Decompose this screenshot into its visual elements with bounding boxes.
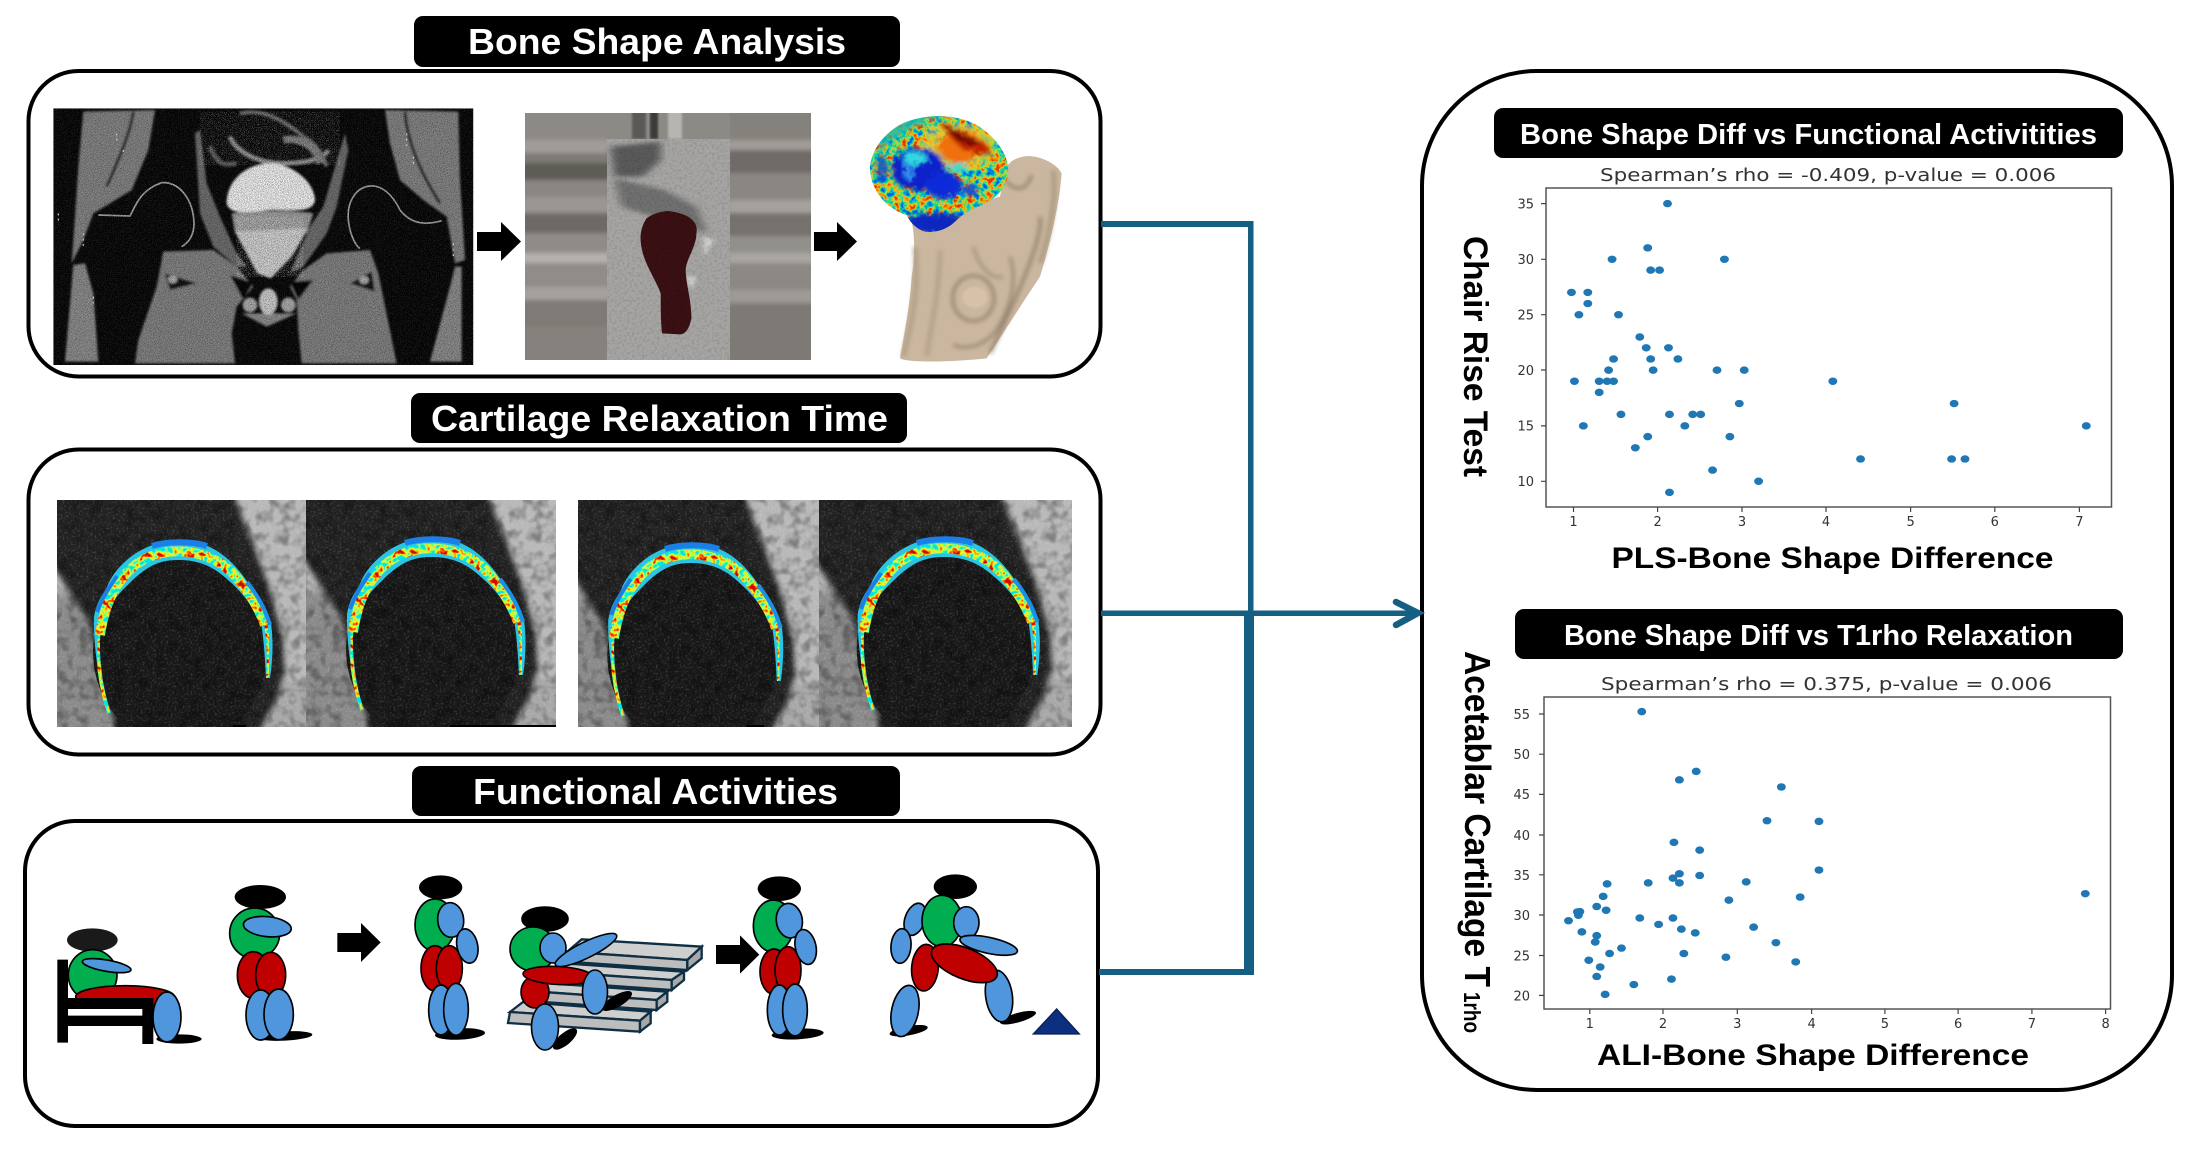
chart title: spearman 2: Spearman’s rho = 0.375, p-value = 0.006 [1601,674,2052,695]
scatter chart: chair rise test: 30 [1517,253,1534,268]
panel: functional activities [25,821,1098,1126]
scatter chart: acetabular cartilage T1rho: 20 [1513,990,1530,1004]
arrow: segmentation to bone model [814,222,857,261]
panel: cartilage relaxation time [28,450,1106,754]
heading: bone shape analysis: Bone Shape Analysis [468,21,846,62]
image: T1rho map 4 [819,500,1072,727]
scatter chart: acetabular cartilage T1rho: 2 [1659,1017,1667,1032]
scatter chart: acetabular cartilage T1rho: 40 [1513,829,1530,844]
heading: functional activities: Functional Activities [473,771,838,812]
scatter chart: acetabular cartilage T1rho: 30 [1513,909,1530,924]
scatter chart: acetabular cartilage T1rho: 4 [1807,1017,1816,1032]
heading: bone shape diff vs T1rho relaxation [1515,609,2123,659]
scatter chart: chair rise test: 1 [1569,515,1578,530]
y axis label: acetabular cartilage T1rho: Acetablar Cartilage T [1457,651,1498,987]
heading: bone shape diff vs functional activities [1494,108,2123,158]
scatter chart: acetabular cartilage T1rho: 3 [1733,1017,1741,1032]
scatter chart: chair rise test: 25 [1517,308,1534,324]
heading: bone shape diff vs functional activities: Bone Shape Diff vs Functional Activitities [1520,119,2097,151]
scatter chart: acetabular cartilage T1rho: 6 [1954,1017,1962,1032]
scatter chart: chair rise test: 3 [1738,515,1746,530]
image: T1rho map 1 [57,500,306,727]
panel: bone shape analysis [28,71,1100,376]
scatter chart: chair rise test: 2 [1653,515,1662,530]
arrow: MRI to segmentation [477,222,521,261]
y axis label: acetabular cartilage T1rho: 1rho [1459,992,1485,1033]
scatter chart: chair rise test: 7 [2075,515,2084,530]
scatter chart: acetabular cartilage T1rho: 25 [1513,950,1530,964]
scatter chart: acetabular cartilage T1rho: 5 [1881,1017,1889,1032]
scatter chart: chair rise test: 4 [1822,515,1830,530]
connector arrow: inputs to results [1099,221,1418,975]
x axis label: ALI bone shape difference: ALI-Bone Shape Difference [1597,1039,2029,1072]
figures: stairs, stepping figure, standing figure, lunge figure and cone [508,874,1079,1053]
scatter chart: chair rise test: 6 [1991,515,1999,530]
heading: cartilage relaxation time: Cartilage Relaxation Time [431,398,888,439]
figures: sit to stand and first arrow [57,875,485,1044]
scatter chart: acetabular cartilage T1rho: 50 [1513,748,1530,763]
scatter chart: acetabular cartilage T1rho [1513,697,2110,1032]
image: T1rho map 2 [306,500,556,727]
scatter chart: acetabular cartilage T1rho: 35 [1513,869,1530,884]
heading: bone shape analysis [414,16,900,67]
image: 3D femur with colour map [863,110,1062,361]
scatter chart: chair rise test: 5 [1906,515,1915,530]
scatter chart: chair rise test: 10 [1517,475,1534,490]
chart title: spearman 1: Spearman’s rho = -0.409, p-value = 0.006 [1600,165,2056,186]
image: coronal hip MRI [53,108,473,365]
scatter chart: acetabular cartilage T1rho: 8 [2101,1017,2110,1032]
scatter chart: acetabular cartilage T1rho: 45 [1513,788,1530,803]
image: T1rho map 3 [578,500,819,727]
heading: functional activities [412,766,900,816]
scatter chart: chair rise test: 35 [1517,198,1534,212]
scatter chart: chair rise test: 20 [1517,364,1534,379]
scatter chart: acetabular cartilage T1rho: 55 [1513,708,1530,723]
image: sagittal MRI with segmentation [525,113,811,360]
scatter chart: chair rise test: 15 [1517,420,1534,434]
heading: bone shape diff vs T1rho relaxation: Bone Shape Diff vs T1rho Relaxation [1564,620,2073,652]
x axis label: PLS bone shape difference: PLS-Bone Shape Difference [1612,542,2054,575]
scatter chart: chair rise test [1517,188,2112,530]
scatter chart: acetabular cartilage T1rho: 7 [2028,1017,2036,1032]
y axis label: chair rise test: Chair Rise Test [1456,236,1494,477]
panel: correlation results [1422,71,2172,1090]
scatter chart: acetabular cartilage T1rho: 1 [1586,1017,1594,1032]
